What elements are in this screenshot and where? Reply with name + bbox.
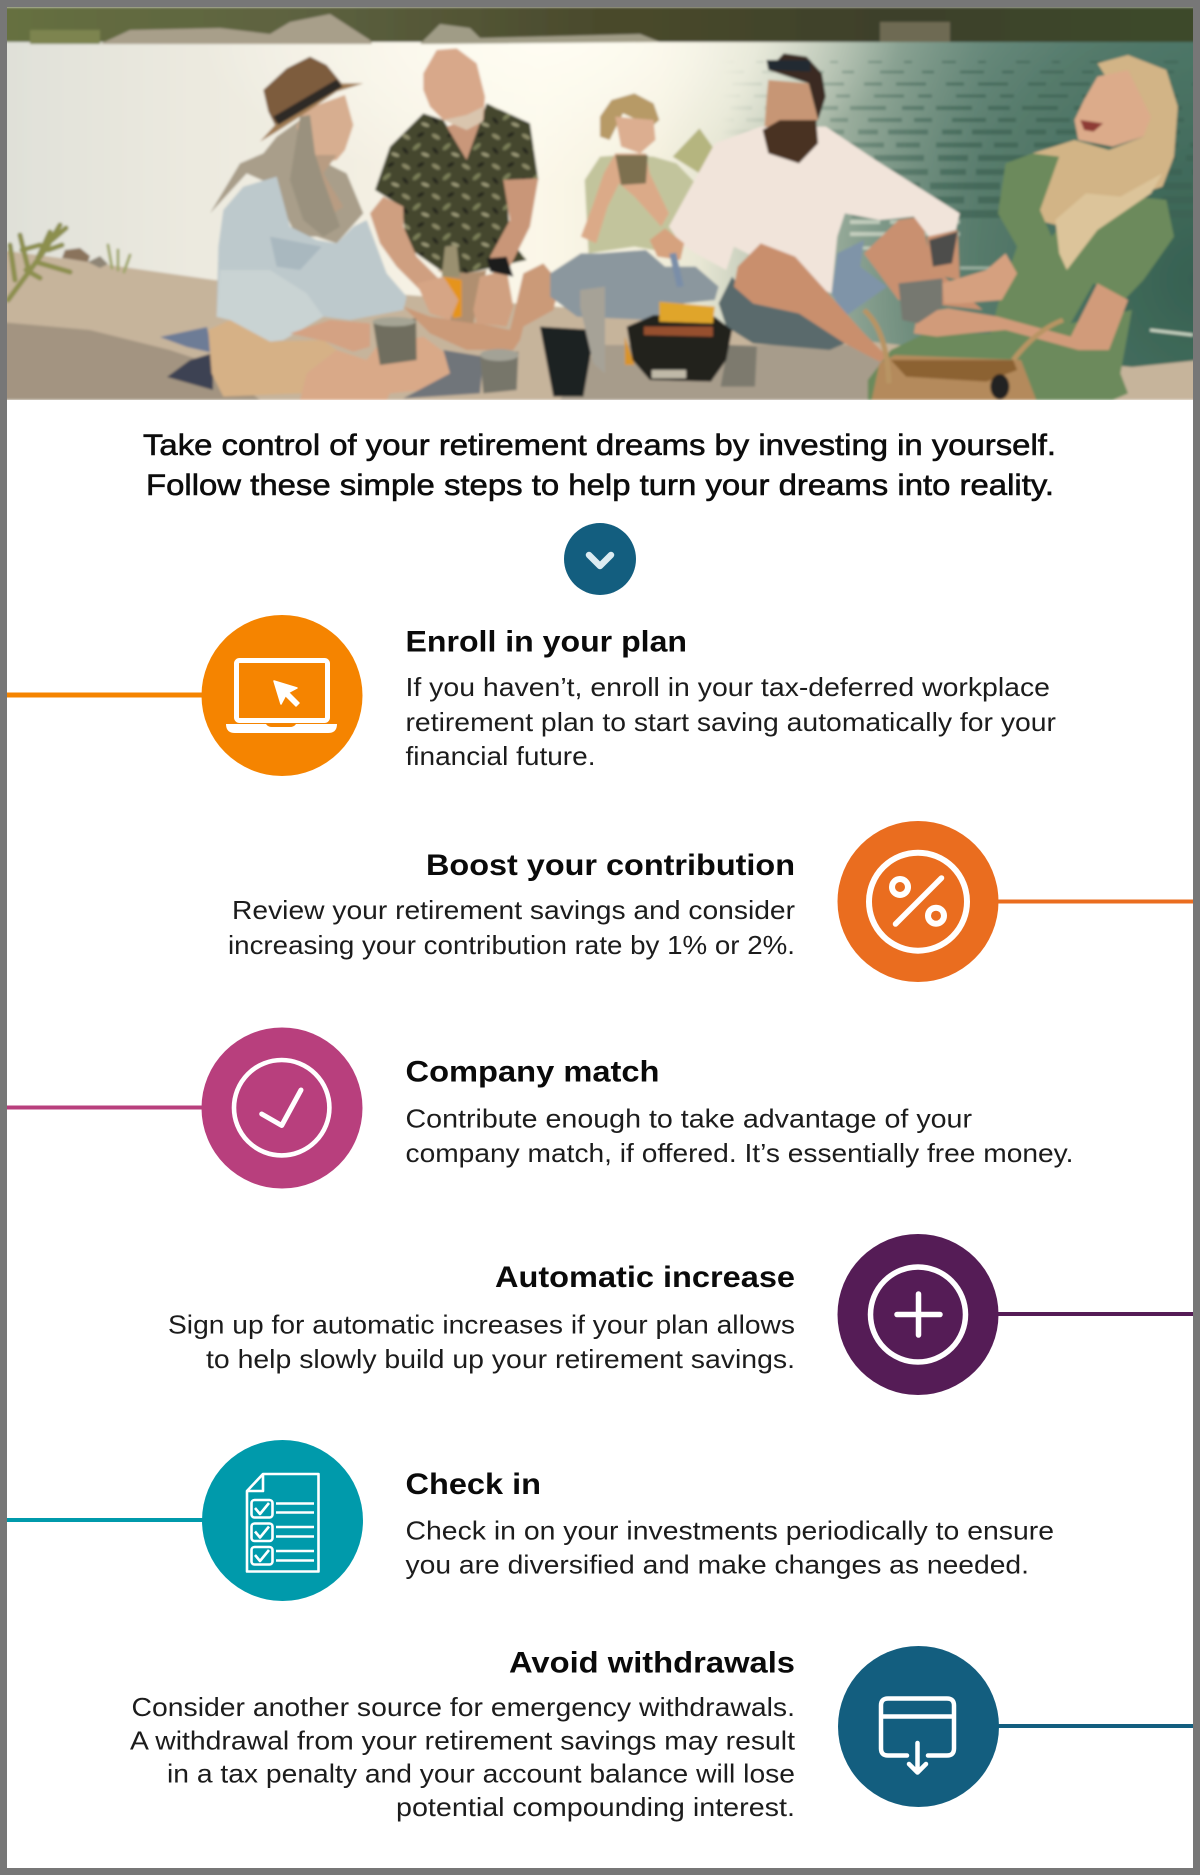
heading: Automatic increase (495, 1261, 795, 1294)
heading: Company match (406, 1056, 660, 1088)
body text: potential compounding interest. (396, 1792, 795, 1822)
step 6: avoid withdrawals (130, 1646, 1193, 1822)
person: older man in patterned shirt (370, 48, 560, 398)
icon: laptop with cursor (202, 615, 362, 776)
intro text: Follow these simple steps to help turn your dreams into reality. (146, 469, 1054, 502)
body text: Check in on your investments periodically to ensure (406, 1516, 1054, 1546)
connector line (7, 1518, 203, 1522)
icon: percent (838, 821, 998, 982)
heading: Avoid withdrawals (509, 1646, 795, 1680)
connector line (997, 1312, 1193, 1316)
step 4: automatic increase (168, 1234, 1193, 1395)
heading: Check in (406, 1468, 541, 1501)
icon: card with download arrow (838, 1646, 999, 1807)
body text (130, 1692, 796, 1822)
body text: financial future. (406, 741, 596, 771)
body text (168, 1310, 795, 1374)
icon: checklist document (202, 1440, 363, 1601)
step 2: boost your contribution (228, 821, 1193, 982)
picnic gear: grill, corn, mugs and basket (625, 302, 1063, 400)
person: child (550, 93, 719, 320)
body text: retirement plan to start saving automatically for your (406, 707, 1056, 737)
body text: Consider another source for emergency withdrawals. (132, 1692, 795, 1722)
connector line (7, 692, 203, 698)
connector line (997, 1724, 1193, 1728)
icon: plus (838, 1234, 998, 1395)
body text (406, 672, 1056, 771)
shoreline plants (8, 225, 130, 300)
step 3: company match (7, 1028, 1074, 1188)
body text (228, 895, 795, 960)
person: bearded man in white shirt (650, 53, 983, 362)
body text: If you haven’t, enroll in your tax-deferred workplace (406, 672, 1050, 702)
heading: Boost your contribution (426, 849, 795, 882)
connector line (7, 1106, 203, 1110)
picnic gear: coffee pot and thermos (480, 287, 605, 397)
intro text: Take control of your retirement dreams by investing in yourself. (143, 429, 1056, 462)
body text: to help slowly build up your retirement savings. (206, 1344, 795, 1374)
body text: increasing your contribution rate by 1% or 2%. (228, 930, 795, 960)
photo: family picnic by a lake (0, 7, 1200, 400)
intro text (143, 429, 1056, 502)
body text: you are diversified and make changes as needed. (406, 1550, 1029, 1580)
body text: Review your retirement savings and consider (232, 895, 795, 925)
body text (406, 1104, 1074, 1168)
sandy shore (0, 248, 1200, 400)
person: laughing blonde woman (868, 55, 1178, 400)
connector line (997, 900, 1193, 904)
body text: A withdrawal from your retirement savings may result (130, 1726, 796, 1756)
body text: Sign up for automatic increases if your plan allows (168, 1310, 795, 1340)
body text (406, 1516, 1054, 1580)
icon: check mark (202, 1028, 362, 1188)
icon: down chevron (564, 523, 636, 595)
far shore with trees (0, 7, 1200, 44)
body text: Contribute enough to take advantage of your (406, 1104, 972, 1134)
lake water (0, 38, 1200, 378)
body text: company match, if offered. It’s essentially free money. (406, 1138, 1074, 1168)
person: older woman with hat (208, 57, 450, 400)
body text: in a tax penalty and your account balance will lose (167, 1758, 795, 1788)
heading: Enroll in your plan (406, 626, 687, 658)
step 5: check in (7, 1440, 1054, 1601)
step 1: enroll in your plan (7, 615, 1056, 776)
